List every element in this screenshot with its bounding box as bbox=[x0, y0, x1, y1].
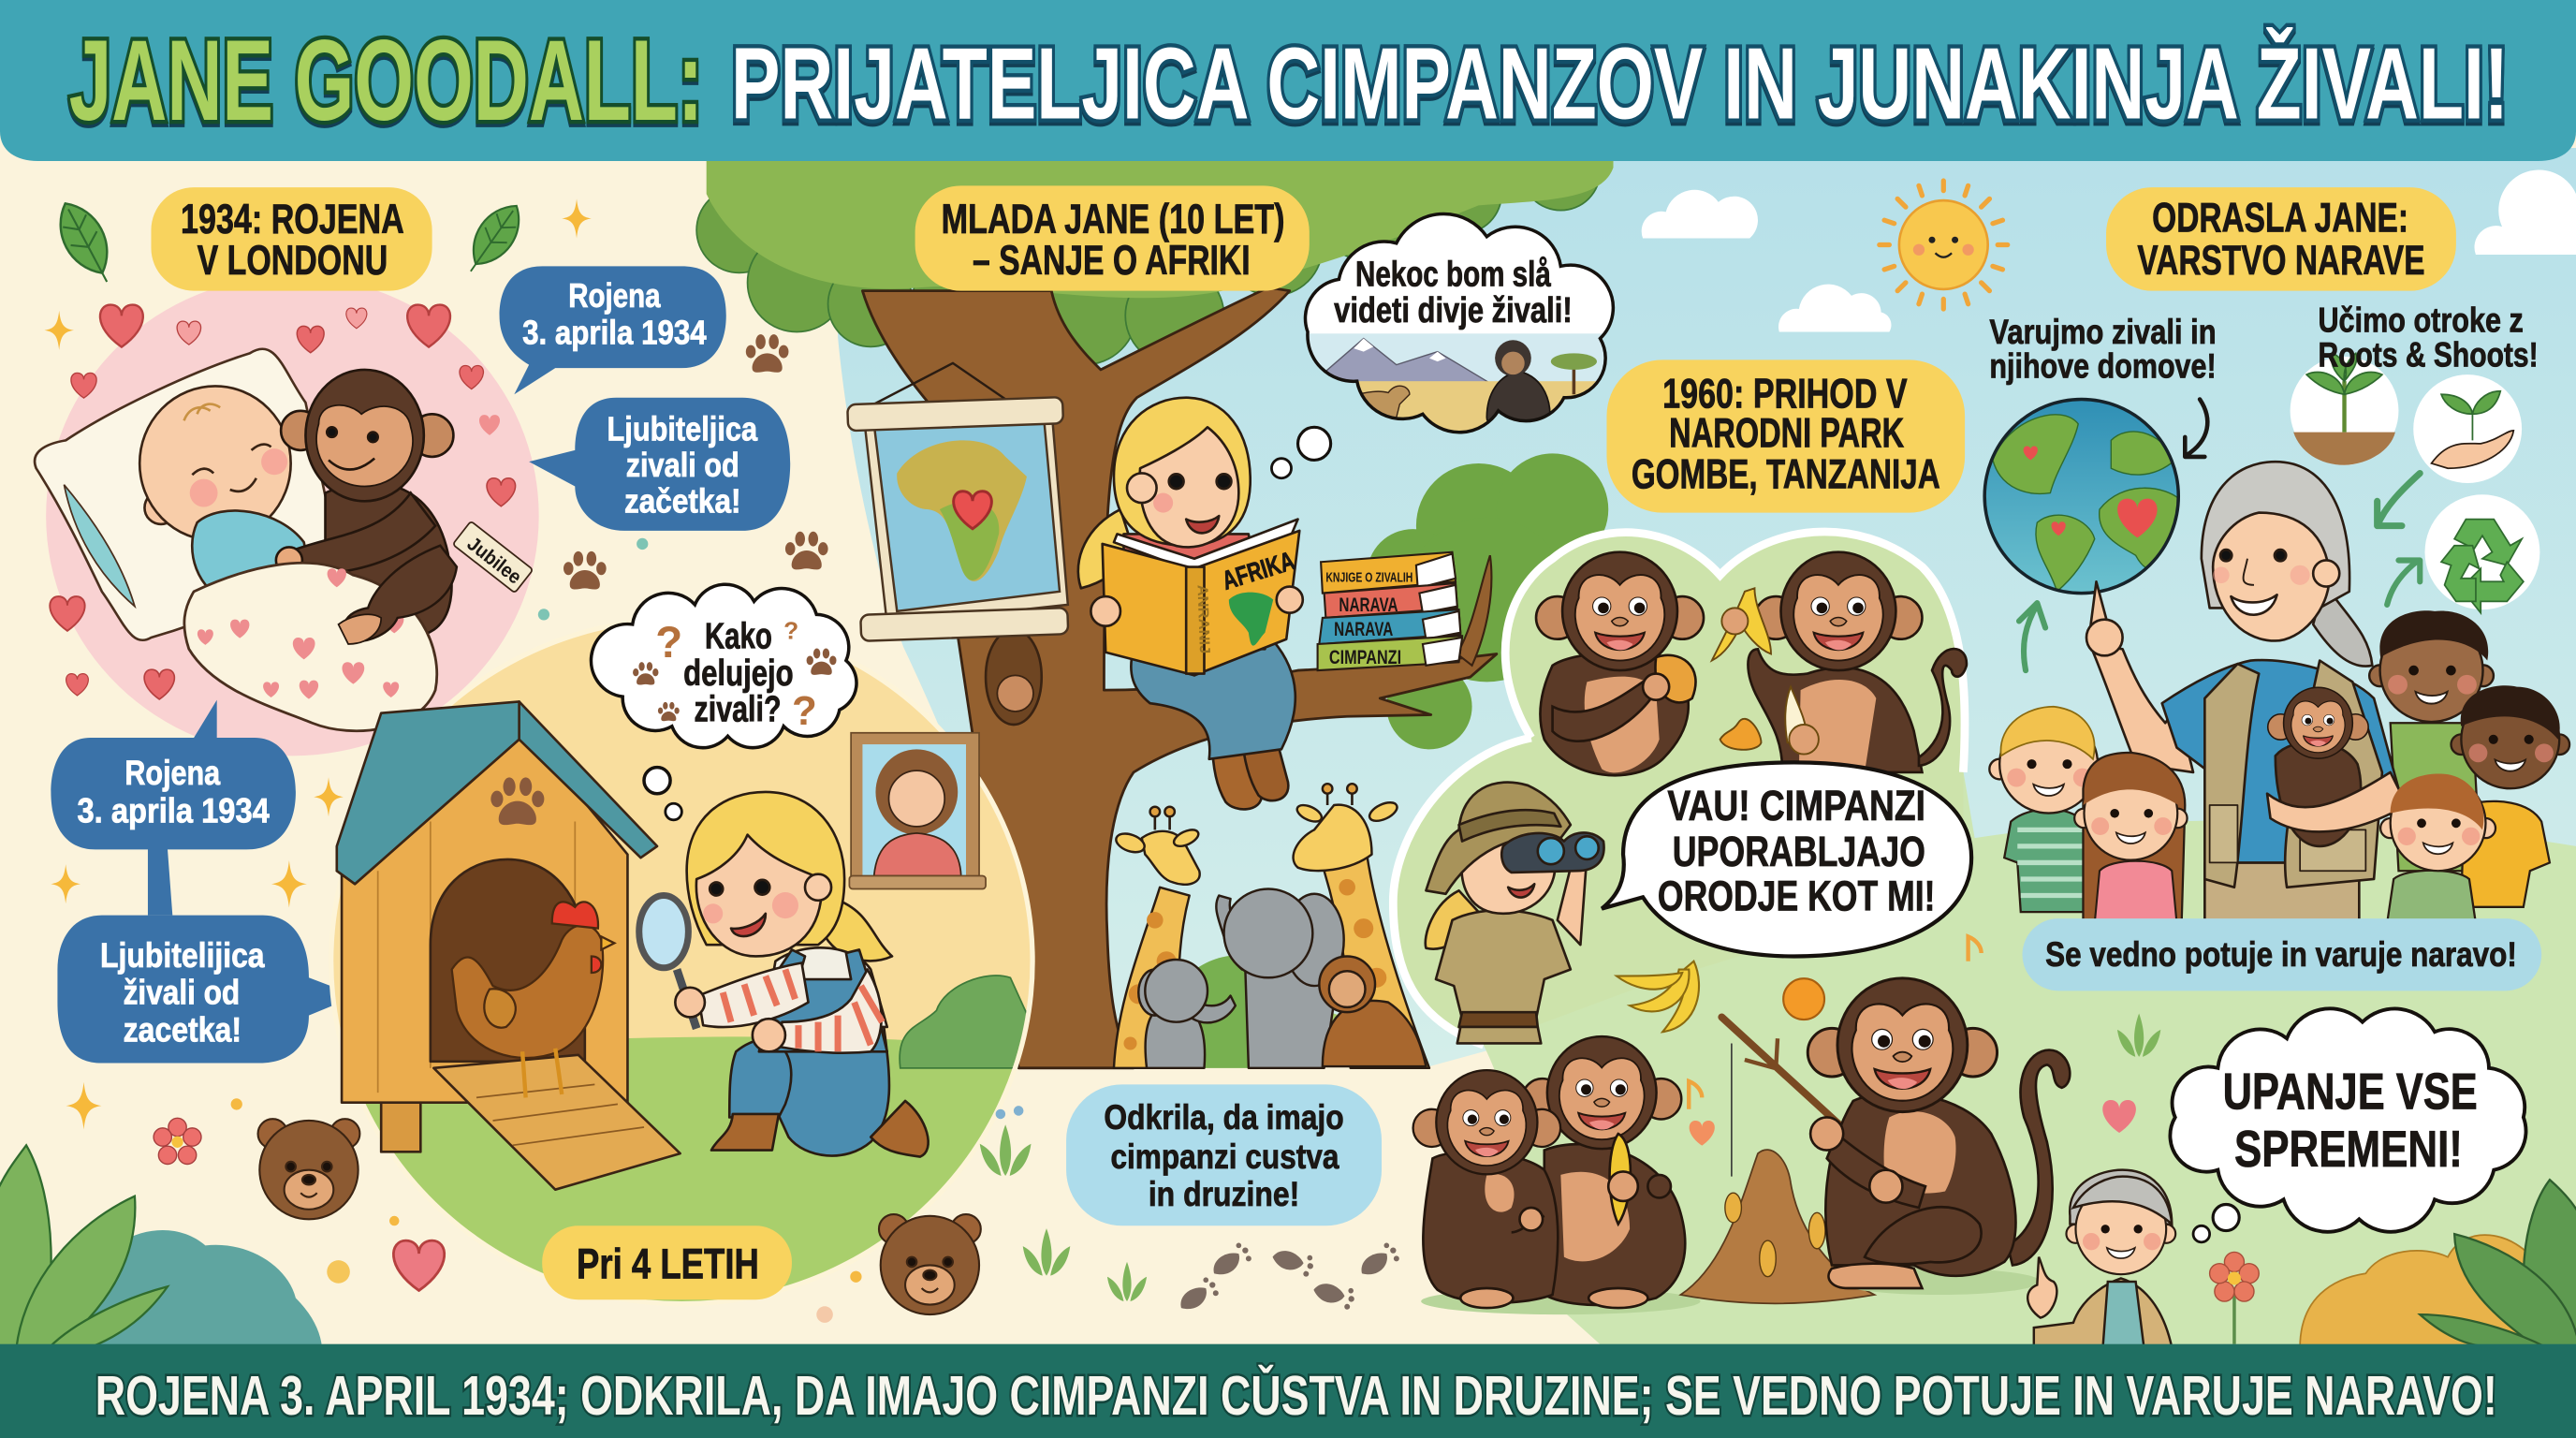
header banner bbox=[0, 0, 2576, 161]
giraffe left bbox=[1114, 807, 1201, 1068]
chimp eating right bbox=[1748, 649, 1967, 772]
heading: adult Jane: ODRASLA JANE: bbox=[2152, 194, 2408, 241]
chimp with stick bbox=[1808, 978, 2070, 1295]
yellow bush bbox=[2300, 1235, 2539, 1347]
elephant small bbox=[1138, 960, 1236, 1068]
heading: adult Jane bbox=[2106, 187, 2456, 291]
icon: sparkles bbox=[44, 198, 592, 1129]
icon: paw on coop bbox=[490, 777, 544, 825]
icon: recycle bbox=[2425, 494, 2539, 613]
pillow bbox=[35, 349, 337, 640]
panel: coop at age 4 bbox=[312, 608, 1051, 1314]
face bbox=[2213, 513, 2330, 640]
boots bbox=[1212, 736, 1262, 809]
speech bubble: animal lover 2: Ljubitelijica bbox=[100, 936, 265, 975]
big tree bbox=[696, 131, 1614, 1068]
thought cloud: how do animals work: delujejo bbox=[683, 653, 794, 694]
twig bbox=[1457, 555, 1491, 666]
text box: discovered feelings: cimpanzi custva bbox=[1110, 1137, 1339, 1176]
savanna scene bbox=[1309, 333, 1604, 431]
speech bubble: animal lover: zivali od bbox=[626, 446, 739, 484]
text box: discovered feelings: Odkrila, da imajo bbox=[1104, 1098, 1344, 1137]
bananas bbox=[1617, 961, 1699, 1032]
chimps with termites bbox=[1413, 936, 2070, 1314]
label: at age 4 bbox=[542, 1225, 792, 1299]
icon: heart bbox=[393, 1240, 445, 1290]
girl bbox=[2074, 753, 2188, 923]
ponytail bbox=[1426, 890, 1479, 949]
hen bbox=[452, 902, 614, 1097]
face bbox=[1140, 427, 1238, 547]
footer banner bbox=[0, 1344, 2576, 1438]
shirt and trousers bbox=[1436, 910, 1571, 1019]
speech bubble: they use tools: VAU! CIMPANZI bbox=[1667, 782, 1925, 829]
text: protect animals: Varujmo zivali in bbox=[1989, 313, 2217, 351]
heading: adult Jane: VARSTVO NARAVE bbox=[2137, 237, 2425, 284]
torso bbox=[764, 947, 887, 1027]
coop bbox=[337, 701, 681, 1190]
leaves bbox=[2420, 1180, 2576, 1347]
map scroll bbox=[847, 363, 1068, 641]
stack of books bbox=[1318, 552, 1462, 670]
heading: 1960 Gombe: GOMBE, TANZANIJA bbox=[1632, 450, 1940, 497]
leaves bbox=[0, 1145, 168, 1347]
termites bbox=[1725, 1193, 1825, 1277]
title bbox=[69, 17, 2509, 145]
title: JANE GOODALL: bbox=[69, 17, 703, 145]
tree hollow with animal bbox=[986, 629, 1042, 725]
footprints bbox=[1180, 1237, 1399, 1319]
question marks and paws: ? bbox=[655, 618, 682, 668]
question marks and paws: ? bbox=[792, 688, 817, 734]
heading: 1960 Gombe bbox=[1606, 360, 1965, 513]
heart bbox=[2102, 1100, 2136, 1133]
arrow: to globe bbox=[2185, 399, 2207, 457]
kids and adult Jane bbox=[1989, 462, 2569, 923]
boy in green shirt bbox=[2369, 610, 2494, 871]
bush bbox=[39, 1230, 322, 1347]
magnifier bbox=[677, 970, 696, 1029]
icon: leaves bbox=[48, 194, 531, 291]
baby bbox=[139, 386, 305, 602]
heading: young Jane bbox=[915, 185, 1310, 291]
icon: flower bbox=[154, 1118, 201, 1164]
thought cloud: how do animals work: Kako bbox=[705, 616, 772, 656]
trunk bbox=[862, 287, 1497, 1068]
heading: young Jane: – SANJE O AFRIKI bbox=[973, 237, 1251, 284]
pants bbox=[2204, 862, 2359, 922]
music note bbox=[1969, 936, 1982, 961]
window with mother bbox=[849, 733, 986, 889]
blond boy bbox=[1989, 707, 2108, 912]
arrows bbox=[2019, 399, 2420, 670]
text: roots and shoots bbox=[2318, 301, 2539, 374]
grass bbox=[1023, 1228, 1070, 1276]
hair bbox=[1114, 398, 1251, 546]
chimp eating left bbox=[1540, 653, 1696, 775]
music note bbox=[1689, 1081, 1702, 1109]
heading: 1934: V LONDONU bbox=[198, 237, 388, 284]
stack of books: NARAVA bbox=[1334, 619, 1393, 640]
chimp pair bbox=[1413, 1036, 1701, 1314]
africa on cover bbox=[1229, 593, 1273, 646]
hearts on globe bbox=[2024, 447, 2158, 537]
arm bbox=[698, 962, 809, 1027]
icon: paws bbox=[564, 334, 828, 589]
question marks and paws bbox=[633, 617, 837, 734]
icon: hand with sprout bbox=[2413, 374, 2522, 483]
stack of books: KNJIGE O ZIVALIH bbox=[1325, 570, 1412, 585]
speech bubble: animal lover bbox=[529, 398, 790, 531]
label: at age 4: Pri 4 LETIH bbox=[577, 1240, 759, 1287]
vest pockets bbox=[2210, 805, 2365, 871]
torso bbox=[1123, 534, 1265, 649]
heading: 1960 Gombe: 1960: PRIHOD V bbox=[1662, 370, 1908, 417]
heading: 1934 bbox=[151, 187, 432, 291]
savanna animals under the tree bbox=[1114, 784, 1429, 1068]
text box: discovered feelings: in druzine! bbox=[1149, 1175, 1299, 1213]
speech bubble: born 2: Rojena bbox=[124, 754, 221, 792]
binoculars bbox=[1501, 832, 1604, 873]
plants and footprints bbox=[980, 1106, 1399, 1319]
hat bbox=[1426, 783, 1571, 894]
arm holding chimp bbox=[2267, 772, 2407, 831]
heading: young Jane: MLADA JANE (10 LET) bbox=[942, 196, 1284, 242]
icon: sprout with roots bbox=[2291, 353, 2398, 465]
hands bbox=[1090, 596, 1120, 626]
grass bbox=[365, 1036, 1018, 1301]
thought cloud: wild animals: videti divje živali! bbox=[1334, 290, 1573, 330]
blanket bbox=[184, 563, 437, 731]
text box: discovered feelings bbox=[1066, 1084, 1382, 1225]
jubilee tag: Jubilee bbox=[463, 533, 525, 589]
speech bubble: animal lover 2: živali od bbox=[124, 973, 240, 1011]
clouds and sun bbox=[1642, 169, 2576, 332]
face bbox=[696, 835, 822, 956]
speech bubble: born 2 bbox=[51, 700, 296, 916]
second sleeve bbox=[779, 970, 882, 1053]
caption: still travels bbox=[2023, 918, 2541, 990]
canopy bbox=[696, 131, 1614, 365]
heading: 1934: 1934: ROJENA bbox=[181, 196, 404, 242]
thought cloud: hope: SPREMENI! bbox=[2234, 1121, 2463, 1178]
grass bbox=[1107, 1262, 1147, 1301]
banana bbox=[1712, 588, 1819, 755]
arrow: green 3 bbox=[2387, 560, 2420, 605]
fishing stick bbox=[1721, 1017, 1914, 1193]
monkey bbox=[276, 370, 453, 636]
heading: 1960 Gombe: NARODNI PARK bbox=[1669, 409, 1904, 456]
arrow: green 2 bbox=[2378, 473, 2420, 526]
legs bbox=[748, 1025, 889, 1156]
open book bbox=[1114, 520, 1298, 572]
speech bubble: animal lover: začetka! bbox=[624, 482, 741, 521]
bush bbox=[899, 975, 1026, 1069]
speech bubble: born bbox=[500, 266, 726, 394]
plant bbox=[980, 1106, 1032, 1176]
panel: Gombe chimpanzees bbox=[1393, 532, 1967, 1045]
stack of books: NARAVA bbox=[1339, 594, 1398, 616]
thought cloud: how do animals work bbox=[591, 584, 856, 820]
pointing arm bbox=[2089, 644, 2193, 772]
thought cloud: how do animals work: zivali? bbox=[695, 689, 782, 729]
jubilee tag bbox=[453, 521, 533, 593]
elephant big bbox=[1216, 889, 1344, 1068]
small background tree bbox=[1367, 453, 1610, 749]
text: protect animals bbox=[1989, 313, 2217, 386]
sky bbox=[838, 148, 2576, 1068]
icon: dots bbox=[231, 538, 862, 1323]
ponytail bbox=[822, 899, 892, 961]
text: protect animals: njihove domove! bbox=[1989, 347, 2217, 386]
speech bubble: born: 3. aprila 1934 bbox=[522, 314, 707, 352]
panel: birth 1934 bbox=[35, 276, 539, 756]
text: roots and shoots: Učimo otroke z bbox=[2318, 301, 2524, 340]
Africa bbox=[897, 440, 1027, 581]
girl reading in tree bbox=[1078, 398, 1303, 809]
icon: bear bbox=[258, 1119, 359, 1219]
thought cloud: hope: UPANJE VSE bbox=[2223, 1064, 2478, 1121]
decorative icons left bbox=[0, 194, 981, 1347]
heart bbox=[1690, 1121, 1715, 1146]
question marks and paws: ? bbox=[783, 617, 798, 645]
speech bubble: animal lover 2 bbox=[57, 916, 357, 1064]
speech bubble: animal lover 2: zacetka! bbox=[124, 1011, 242, 1049]
speech bubble: born: Rojena bbox=[568, 276, 661, 315]
green meadow bbox=[1393, 723, 2576, 1347]
thought cloud: hope bbox=[2170, 1008, 2526, 1242]
boy with red hair bbox=[2380, 773, 2496, 923]
thought cloud: wild animals: Nekoc bom slå bbox=[1355, 254, 1552, 293]
shirt bbox=[2162, 660, 2398, 862]
small monkey bbox=[1319, 956, 1426, 1066]
young Jane bbox=[639, 792, 929, 1157]
safari Jane with binoculars bbox=[1426, 783, 1604, 1043]
termite mound bbox=[1680, 1150, 1875, 1303]
globe bbox=[1984, 399, 2182, 594]
speech bubble: they use tools bbox=[1602, 762, 1971, 956]
speech bubble: they use tools: UPORABLJAJO bbox=[1673, 828, 1925, 875]
older Jane bbox=[2027, 1170, 2175, 1347]
arrow: to globe green bbox=[2019, 603, 2045, 670]
monkey leg bbox=[344, 546, 457, 641]
book text: AFRIKA bbox=[1219, 546, 1298, 595]
wall bbox=[312, 608, 1051, 1084]
hearts bbox=[50, 305, 516, 699]
speech bubble: born 2: 3. aprila 1934 bbox=[77, 791, 270, 829]
icon: bear bbox=[879, 1214, 981, 1314]
arm raised bbox=[1558, 855, 1587, 945]
legs bbox=[1131, 640, 1295, 759]
speech bubble: animal lover: Ljubiteljica bbox=[607, 409, 758, 448]
face bbox=[1461, 842, 1555, 914]
stack of books: CIMPANZI bbox=[1329, 647, 1401, 668]
bottom right scene bbox=[2027, 1008, 2576, 1347]
orange bbox=[1783, 978, 1824, 1020]
vest bbox=[2204, 661, 2382, 888]
boy in yellow shirt bbox=[2452, 685, 2569, 907]
grass bbox=[2117, 1014, 2160, 1057]
ponytail bbox=[1078, 509, 1134, 588]
hair tail bbox=[2313, 583, 2372, 667]
girl reading in tree: ANRANIJ bbox=[1193, 584, 1212, 654]
flower bbox=[2210, 1252, 2259, 1344]
hair bbox=[687, 792, 844, 945]
speech bubble: they use tools: ORODJE KOT MI! bbox=[1658, 872, 1936, 919]
hair bbox=[2202, 462, 2349, 608]
icon: sun bbox=[1880, 181, 2008, 309]
giraffe right bbox=[1294, 784, 1429, 1068]
thought cloud: wild animals bbox=[1271, 214, 1627, 478]
baby chimp bbox=[2276, 742, 2361, 846]
adult Jane bbox=[2086, 462, 2407, 922]
